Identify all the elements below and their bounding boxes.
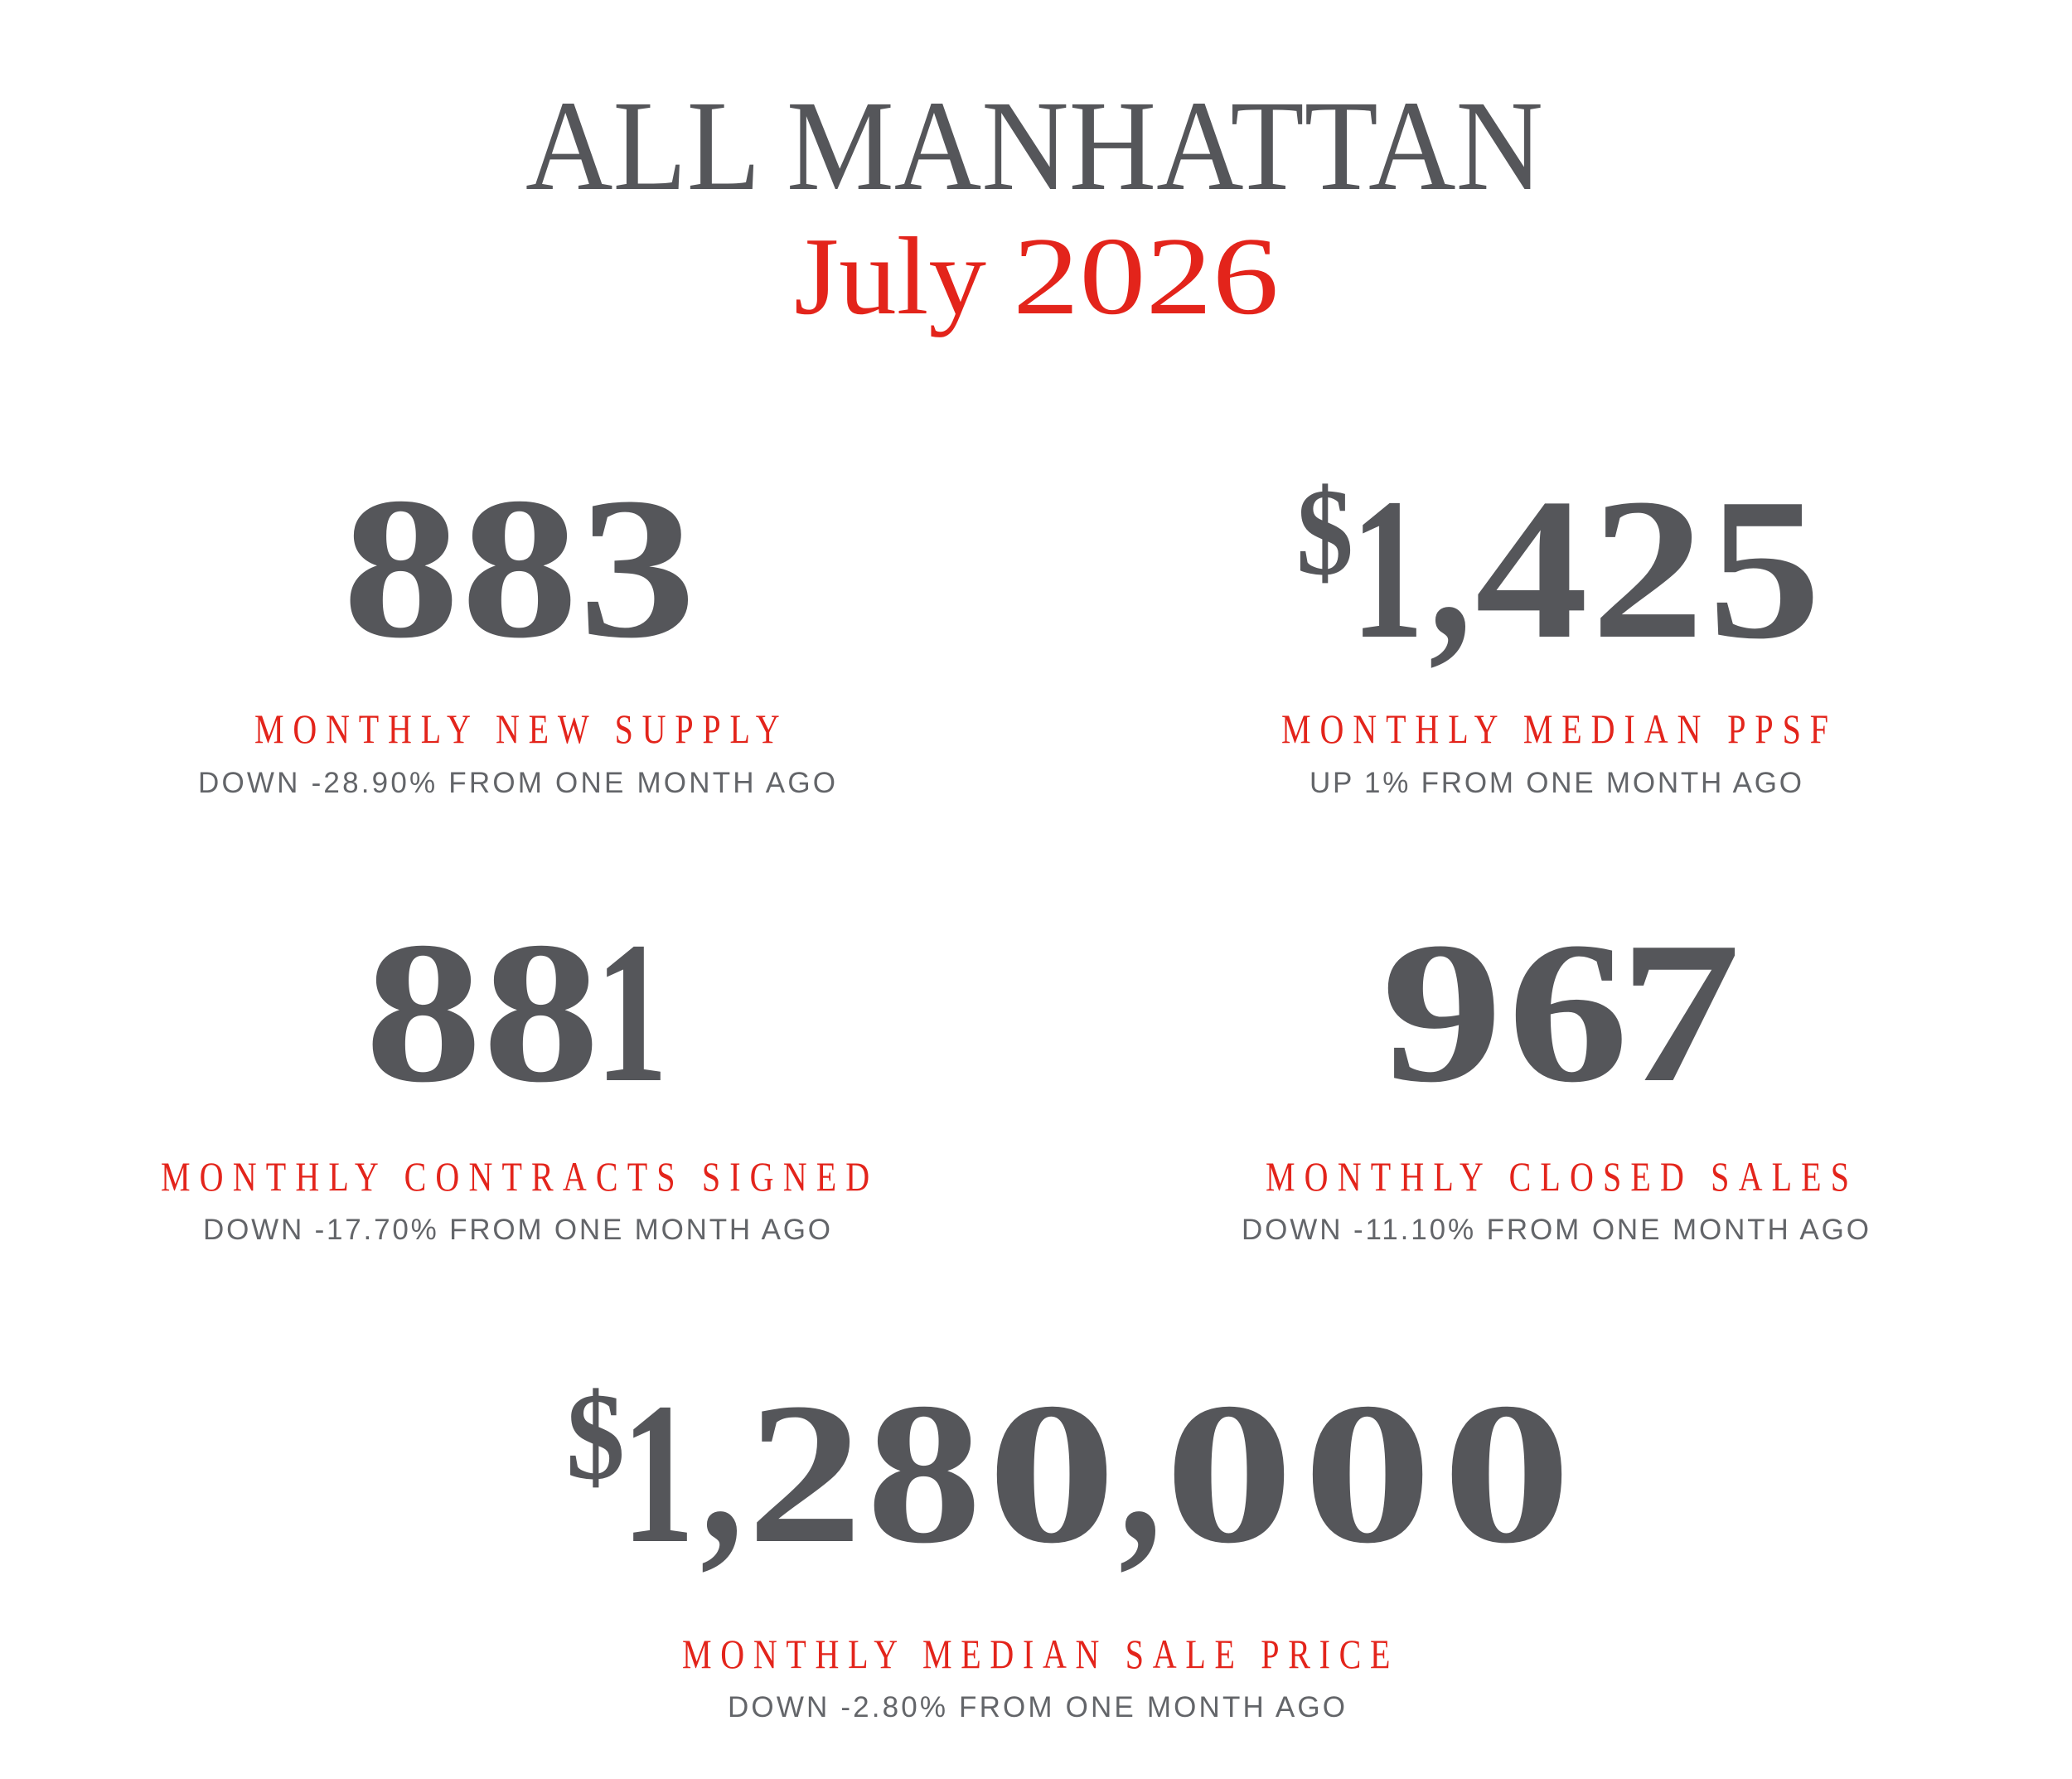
subtitle: date (794, 215, 1279, 337)
value: , (700, 1360, 743, 1585)
label: MONTHLY CONTRACTS SIGNED (161, 1154, 869, 1200)
label: MONTHLY MEDIAN PPSF (1281, 706, 1828, 752)
subtitle: date: July (794, 215, 986, 337)
value: 28 (748, 1361, 982, 1585)
title (525, 74, 1543, 337)
panel: monthly new supply (198, 457, 835, 799)
value: 1 (622, 1361, 695, 1585)
change note: DOWN -17.70% FROM ONE MONTH AGO (203, 1214, 830, 1246)
change note: DOWN -2.80% FROM ONE MONTH AGO (728, 1691, 1345, 1723)
value: , (1119, 1360, 1162, 1585)
change note: UP 1% FROM ONE MONTH AGO (1310, 767, 1802, 799)
value (566, 1360, 1571, 1585)
panel: monthly closed sales (1242, 901, 1869, 1246)
value (1296, 456, 1821, 681)
title: ALL MANHATTAN (525, 74, 1543, 217)
label: MONTHLY MEDIAN SALE PRICE (682, 1631, 1390, 1677)
change note: DOWN -11.10% FROM ONE MONTH AGO (1242, 1214, 1869, 1246)
value: $ (566, 1368, 625, 1505)
value: , (1429, 456, 1472, 681)
value: 967 (1382, 901, 1740, 1124)
value: 0 (987, 1360, 1116, 1585)
value: 425 (1475, 457, 1821, 681)
panel: monthly contracts signed (161, 900, 869, 1246)
value: 88 (365, 901, 600, 1125)
value: 1 (1351, 457, 1424, 681)
value: 883 (342, 457, 696, 681)
panel: monthly median ppsf (1281, 456, 1828, 799)
value: $ (1296, 463, 1353, 601)
label: MONTHLY CLOSED SALES (1266, 1154, 1849, 1200)
value: 1 (595, 900, 668, 1124)
label: MONTHLY NEW SUPPLY (254, 706, 780, 752)
change note: DOWN -28.90% FROM ONE MONTH AGO (198, 767, 835, 799)
subtitle: date: 2026 (1013, 215, 1279, 337)
value: 000 (1164, 1360, 1571, 1585)
panel: monthly median sale price (566, 1360, 1571, 1723)
